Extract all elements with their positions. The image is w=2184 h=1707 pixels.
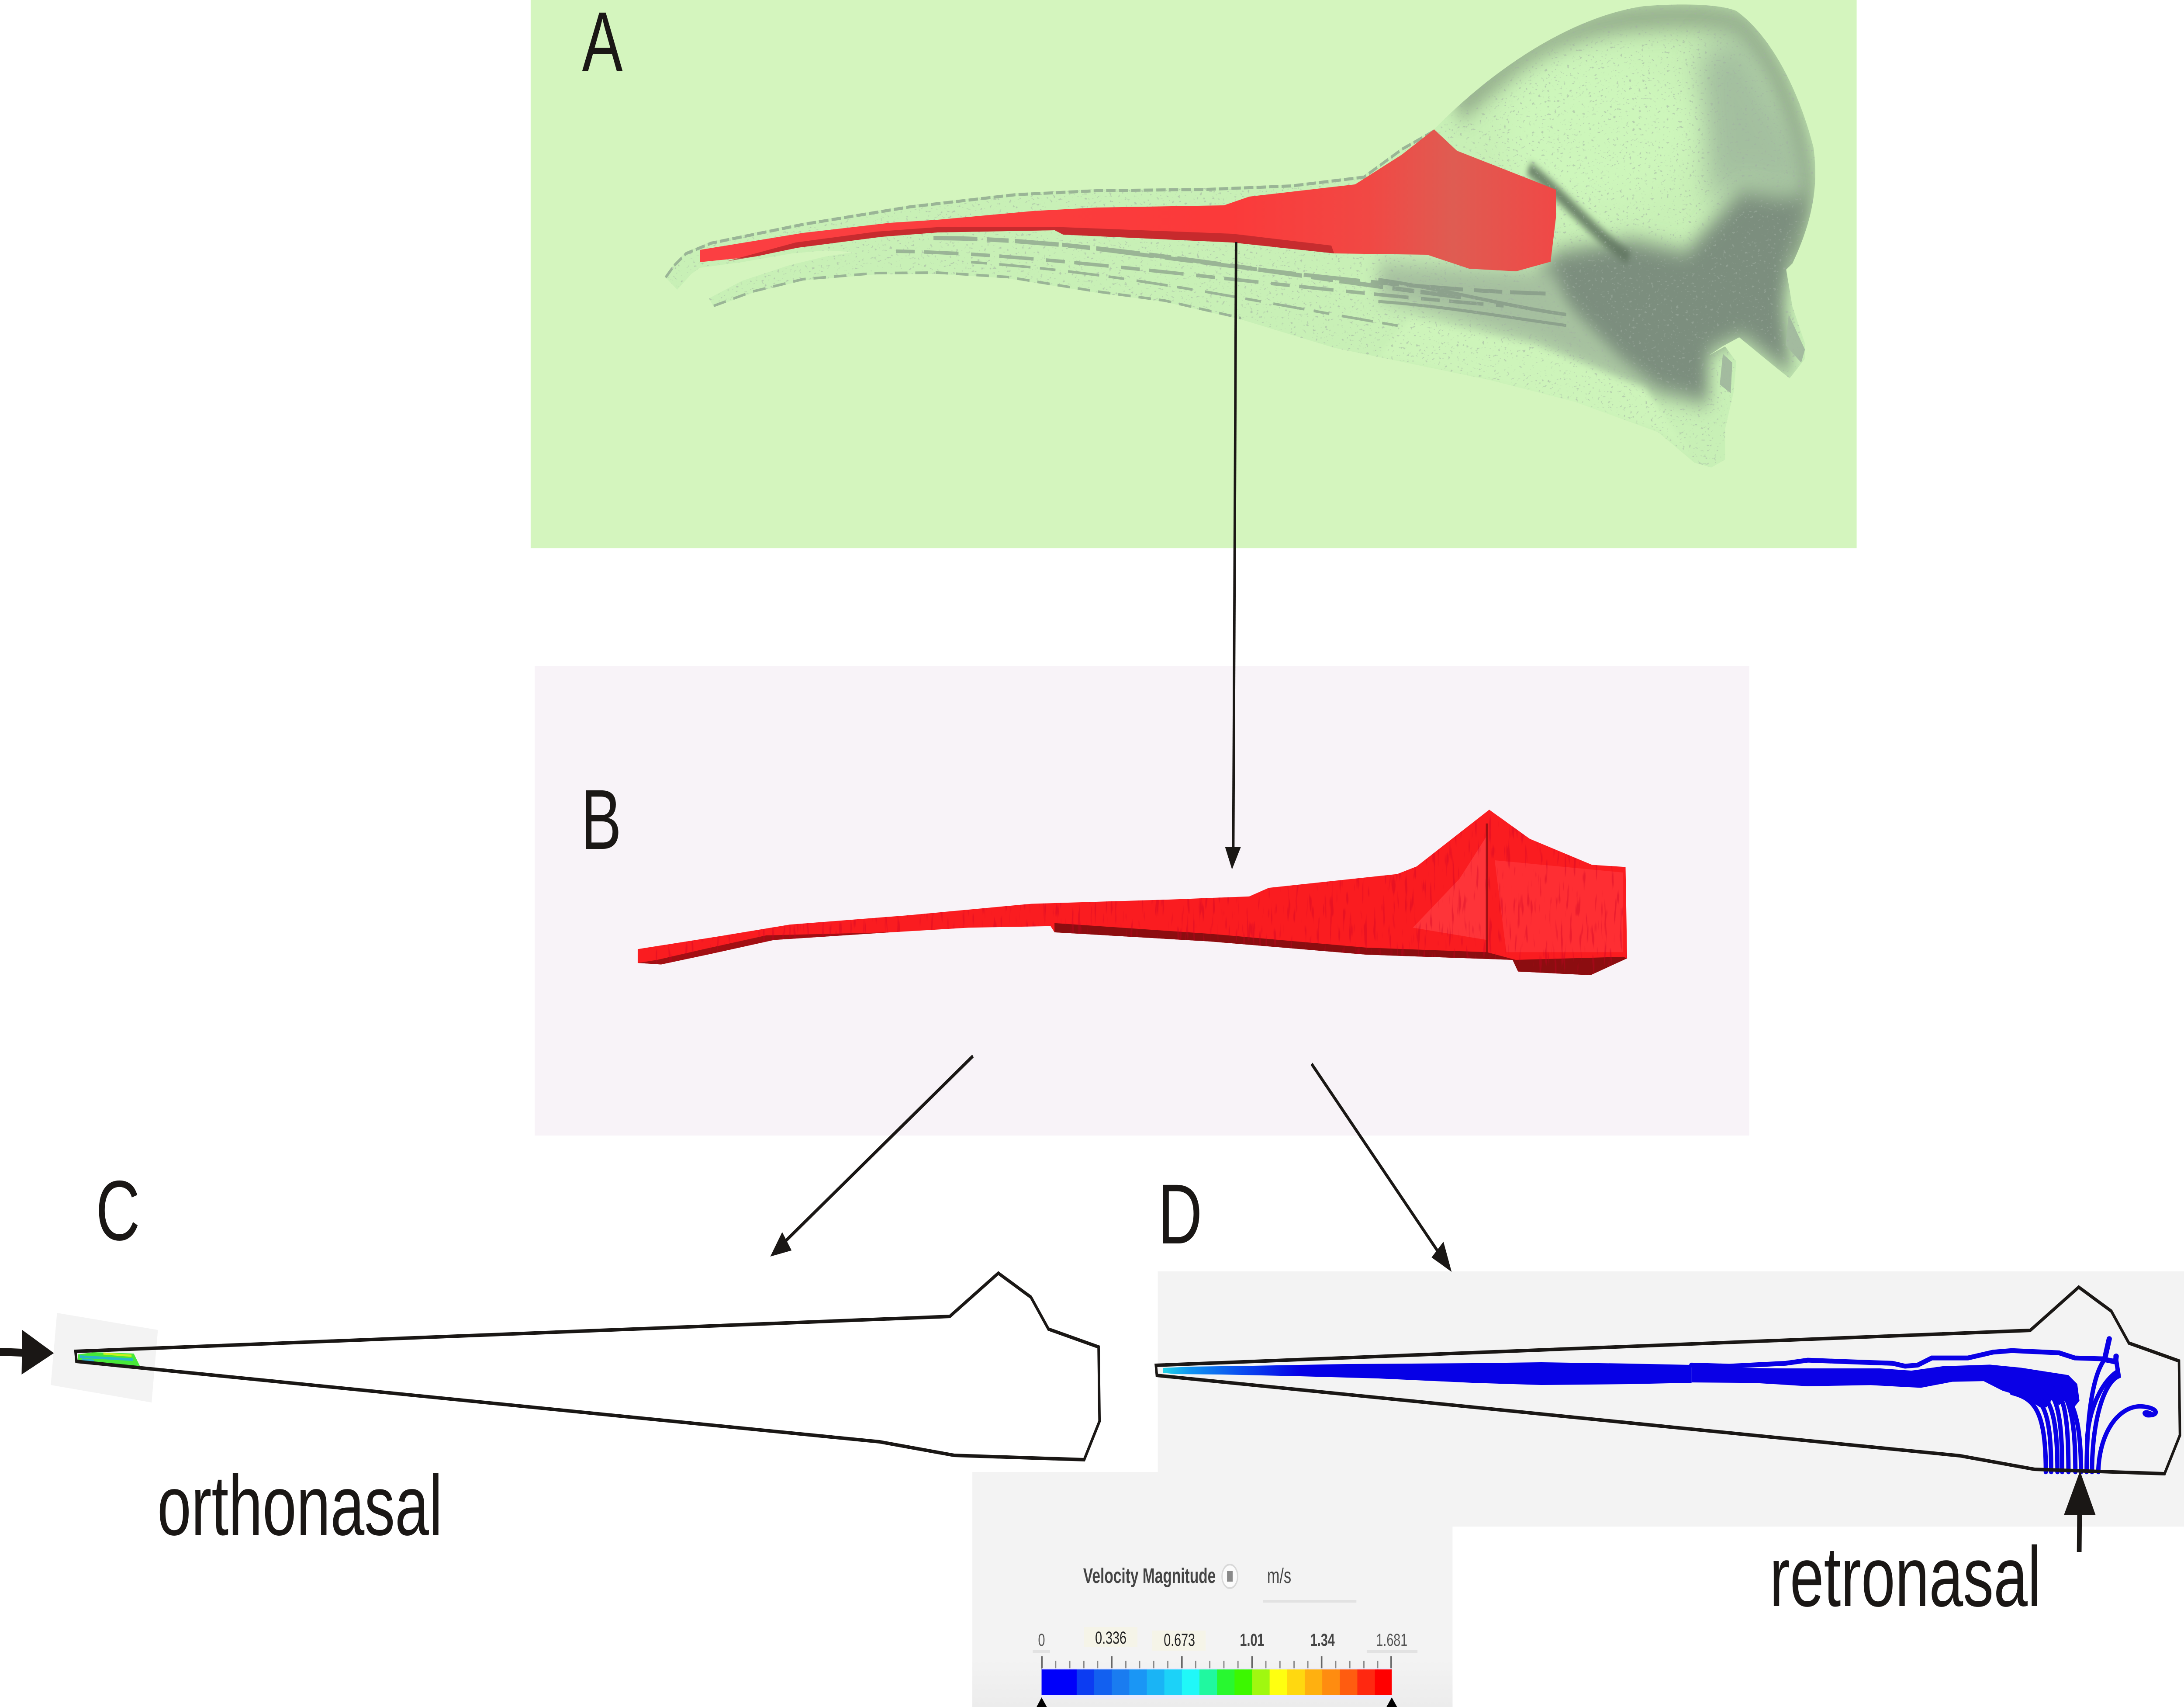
- retronasal cavity outline: [1156, 1287, 2180, 1474]
- head shading: [1378, 16, 1809, 454]
- legend colour bar: [1042, 1668, 1392, 1699]
- label D: D: [1158, 1166, 1202, 1261]
- arrow: orthonasal inflow: [0, 1330, 54, 1375]
- orthonasal velocity wedge: [78, 1352, 140, 1366]
- legend scale values: 0: [1038, 1630, 1045, 1650]
- panel: velocity legend: [972, 1472, 1452, 1707]
- legend info icon: [1222, 1565, 1237, 1588]
- legend scale values: 0.336: [1095, 1628, 1127, 1648]
- panel C: orthonasal model grey inset: [51, 1273, 1099, 1460]
- skull with beak: [658, 0, 1823, 481]
- legend scale values: 1.01: [1240, 1630, 1264, 1650]
- panel D: retronasal model grey background: [972, 1271, 2184, 1707]
- legend scale values: 0.673: [1164, 1630, 1195, 1650]
- red nasal cavity inside skull: [700, 129, 1556, 271]
- arrow: B to C: [770, 1056, 973, 1257]
- panel B: isolated nasal cavity on pink background: [535, 666, 1749, 1136]
- arrow: retronasal inflow: [2064, 1471, 2096, 1552]
- bill streaks: [665, 129, 1566, 328]
- label C: C: [96, 1163, 140, 1258]
- label retronasal: retronasal: [1769, 1529, 2041, 1624]
- retronasal streamlines: [1163, 1339, 2156, 1472]
- legend range handles: [1037, 1697, 1397, 1707]
- legend title: Velocity Magnitude: [1083, 1564, 1216, 1587]
- legend tick marks: [1056, 1661, 1378, 1669]
- legend scale values: [1038, 1628, 1407, 1650]
- label B: B: [581, 772, 622, 867]
- legend unit: m/s: [1267, 1564, 1291, 1587]
- legend scale values: 1.681: [1376, 1630, 1407, 1650]
- legend scale values: 1.34: [1310, 1630, 1335, 1650]
- panel A: skull CT on green background: [531, 0, 1857, 548]
- arrow: B to D: [1312, 1064, 1451, 1272]
- orthonasal cavity outline: [76, 1273, 1099, 1460]
- red nasal cavity model: [638, 810, 1627, 975]
- arrow: A to B: [1225, 242, 1241, 869]
- label orthonasal: orthonasal: [157, 1458, 442, 1553]
